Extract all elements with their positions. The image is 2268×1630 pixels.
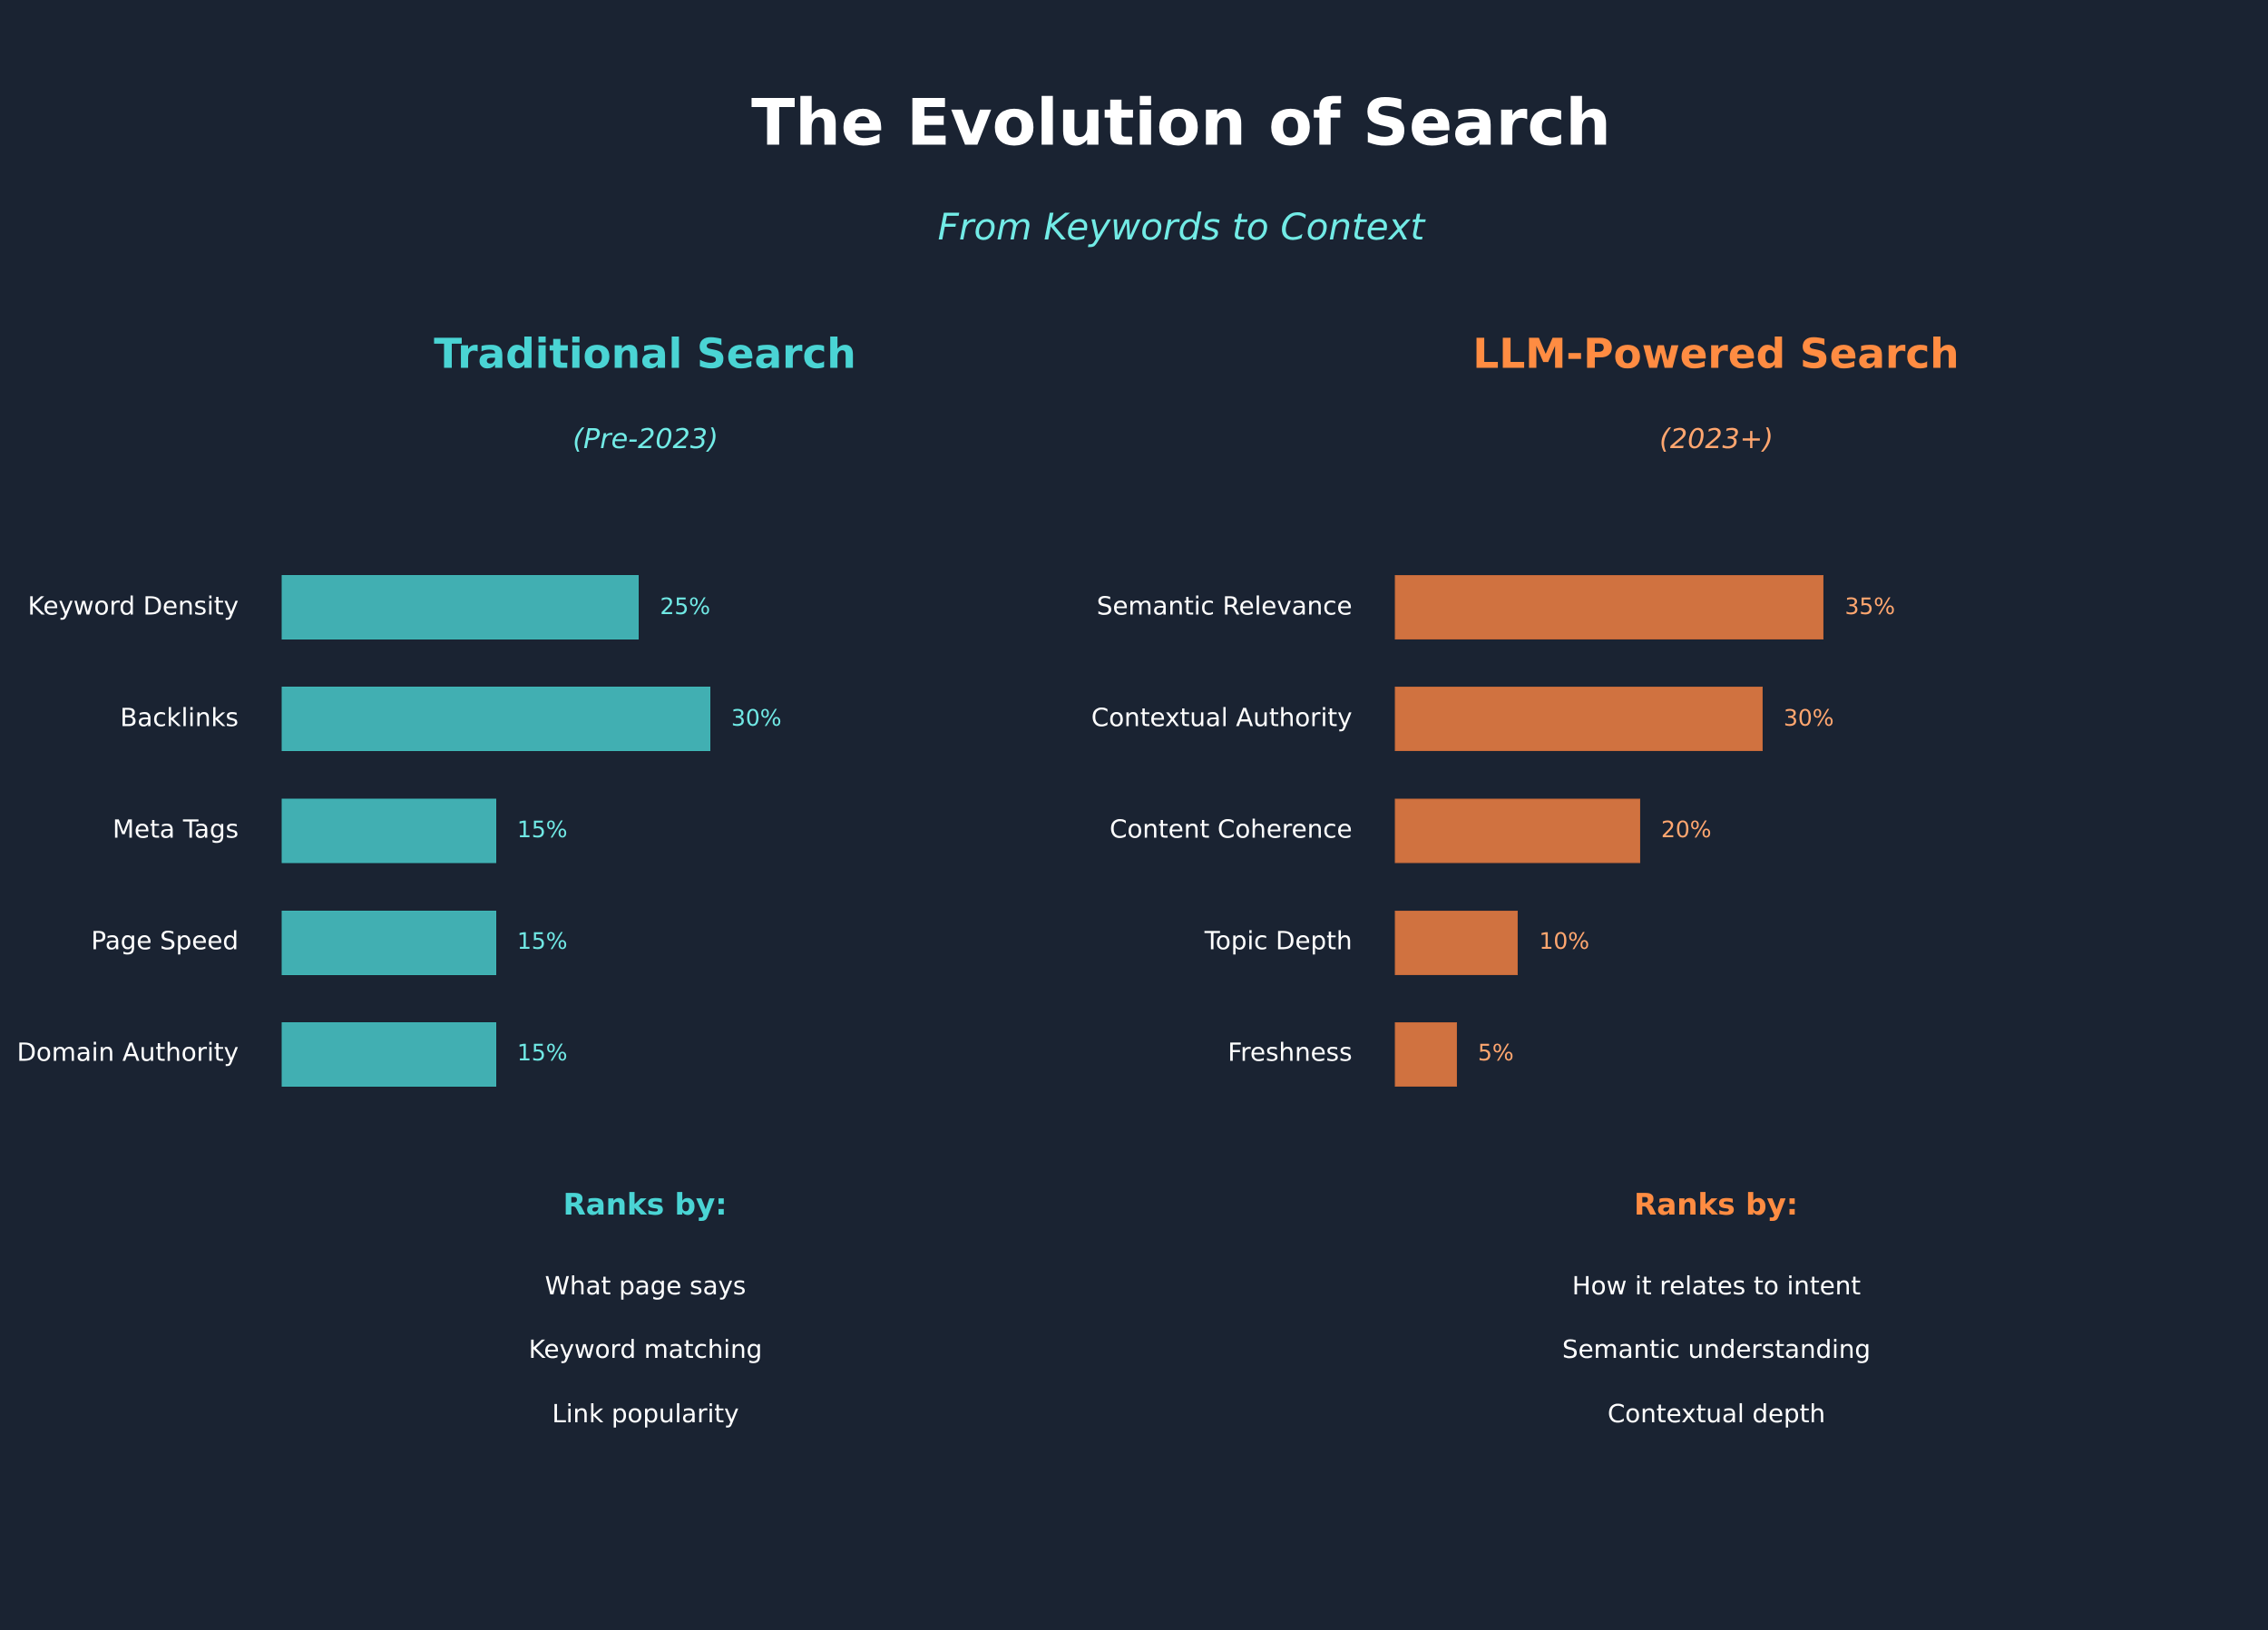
ranks by: llm — [1562, 1187, 1871, 1429]
subtitle: From Keywords to Context — [938, 205, 1427, 249]
row: semantic relevance 35%: Semantic Relevance — [1097, 591, 1352, 620]
row: freshness 5%: Freshness — [1227, 1038, 1352, 1067]
row: content coherence 20% — [1110, 799, 1712, 863]
row: topic depth 10%: Topic Depth — [1204, 925, 1352, 956]
row: meta tags 15%: Meta Tags — [112, 815, 239, 844]
row: keyword density 25% — [28, 575, 710, 639]
row: domain authority 15%: Domain Authority — [17, 1038, 239, 1067]
row: backlinks 30%: 30% — [731, 705, 782, 731]
row: page speed 15% — [91, 911, 568, 974]
row: meta tags 15% — [112, 799, 568, 863]
panel: traditional search — [17, 330, 856, 1429]
row: contextual authority 30%: 30% — [1784, 705, 1834, 731]
row: semantic relevance 35% — [1097, 575, 1895, 639]
ranks by item: Keyword matching — [529, 1334, 762, 1364]
row: content coherence 20%: 20% — [1661, 816, 1712, 843]
ranks by item: How it relates to intent — [1572, 1271, 1861, 1301]
row: domain authority 15%: 15% — [517, 1039, 568, 1066]
row: freshness 5%: 5% — [1478, 1039, 1514, 1066]
title: The Evolution of Search — [751, 85, 1611, 160]
row: contextual authority 30% — [1091, 688, 1834, 751]
row: semantic relevance 35%: 35% — [1845, 593, 1895, 620]
row: meta tags 15%: 15% — [517, 816, 568, 843]
ranks by item: Link popularity — [552, 1399, 739, 1429]
ranks by item: What page says — [545, 1271, 746, 1301]
ranks by item: Contextual depth — [1608, 1399, 1825, 1429]
heading: traditional search: Traditional Search — [434, 330, 856, 377]
row: page speed 15%: Page Speed — [91, 925, 239, 956]
row: keyword density 25%: 25% — [660, 593, 710, 620]
bar chart: traditional ranking factors — [17, 575, 782, 1087]
era label: 2023+: (2023+) — [1659, 424, 1774, 455]
row: domain authority 15% — [17, 1023, 568, 1087]
row: topic depth 10%: 10% — [1539, 928, 1589, 954]
row: content coherence 20%: Content Coherence — [1110, 815, 1352, 844]
ranks by heading: Ranks by: — [563, 1187, 727, 1222]
panel: llm-powered search — [1091, 330, 1960, 1429]
row: keyword density 25%: Keyword Density — [28, 591, 239, 620]
row: contextual authority 30%: Contextual Authority — [1091, 702, 1352, 733]
row: page speed 15%: 15% — [517, 928, 568, 954]
bar chart: llm ranking factors — [1091, 575, 1895, 1087]
era label: pre-2023: (Pre-2023) — [572, 424, 719, 455]
ranks by item: Semantic understanding — [1562, 1334, 1871, 1364]
ranks by: traditional — [529, 1187, 762, 1429]
row: backlinks 30% — [120, 688, 782, 751]
row: backlinks 30%: Backlinks — [120, 702, 239, 733]
heading: llm-powered search: LLM-Powered Search — [1472, 330, 1960, 377]
row: freshness 5% — [1227, 1023, 1514, 1087]
row: topic depth 10% — [1204, 911, 1589, 974]
ranks by heading: Ranks by: — [1634, 1187, 1798, 1222]
